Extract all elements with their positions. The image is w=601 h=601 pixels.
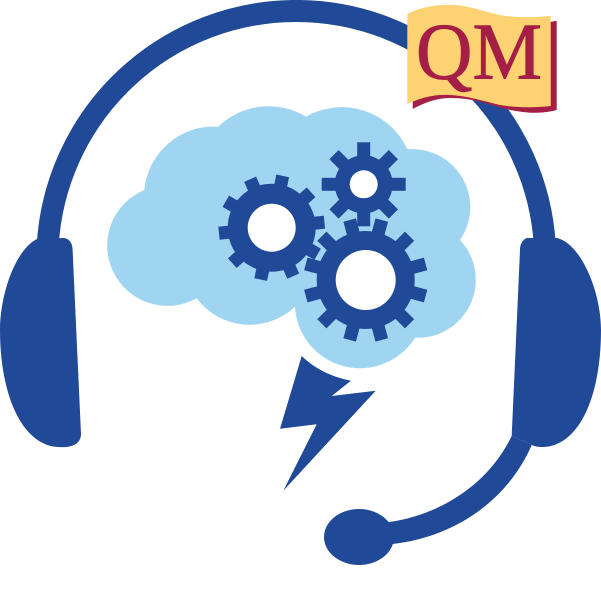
icon: microphone head (324, 509, 394, 565)
icon: headband (48, 11, 545, 245)
flag letters: QM (416, 8, 542, 96)
icon: lightning bolt (280, 356, 376, 491)
icon: large gear, bottom (304, 218, 427, 342)
icon: left ear cup (0, 238, 81, 447)
icon: right ear cup (512, 238, 601, 447)
logo: QM flag (407, 5, 557, 113)
icon: medium gear, left (218, 175, 325, 281)
icon: cloud (107, 106, 476, 368)
flag body (407, 5, 551, 107)
flag shadow (413, 21, 557, 113)
icon: microphone arm (388, 436, 532, 544)
icon: small gear, top right (322, 142, 406, 226)
